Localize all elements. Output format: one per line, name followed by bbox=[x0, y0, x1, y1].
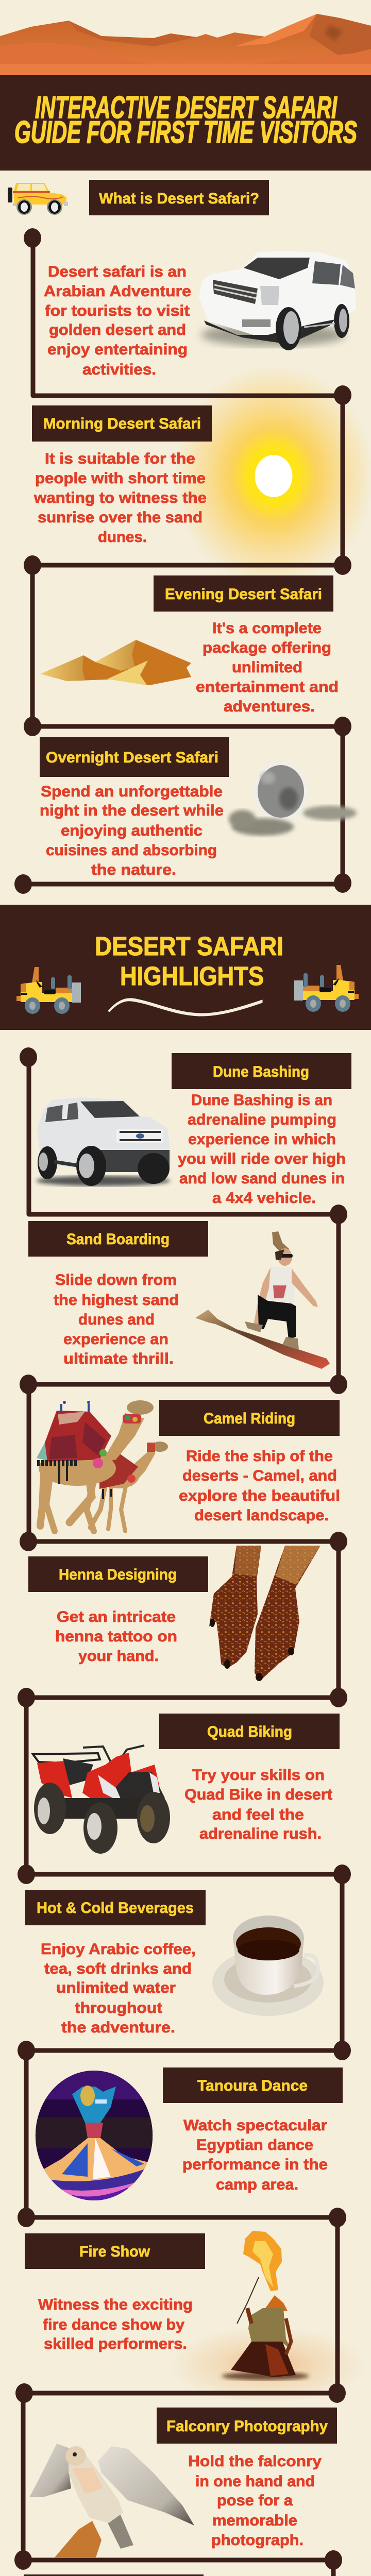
text: morning: dunes. bbox=[98, 529, 147, 546]
text: dune bashing: a 4x4 vehicle. bbox=[212, 1190, 316, 1207]
photo: coffee cup bbox=[212, 1916, 324, 2016]
heading: henna designing: Henna Designing bbox=[59, 1566, 177, 1583]
text: henna: henna tattoo on bbox=[55, 1628, 177, 1645]
text: morning: wanting to witness the bbox=[33, 489, 207, 506]
text: tanoura: Egyptian dance bbox=[196, 2137, 313, 2154]
text: what is desert safari: Desert safari is an bbox=[48, 263, 187, 280]
heading: camel riding: Camel Riding bbox=[204, 1410, 295, 1427]
text: quad biking: and feel the bbox=[212, 1806, 304, 1823]
text: tanoura: camp area. bbox=[216, 2176, 298, 2193]
photo: white SUV bbox=[199, 251, 356, 350]
text: sand boarding: dunes and bbox=[78, 1311, 155, 1328]
heading: fire show: Fire Show bbox=[79, 2243, 150, 2260]
connector frame: buffet bbox=[13, 2560, 342, 2576]
text: fire show: skilled performers. bbox=[44, 2335, 187, 2352]
connector frame: overnight bbox=[14, 726, 351, 894]
heading: falconry photography bbox=[157, 2408, 337, 2444]
text: falconry: in one hand and bbox=[195, 2473, 315, 2490]
text: evening: It's a complete bbox=[212, 620, 322, 637]
text: what is desert safari: for tourists to visit bbox=[45, 302, 190, 319]
text: beverages: unlimited water bbox=[56, 1979, 176, 1996]
text: beverages: the adventure. bbox=[61, 2019, 175, 2036]
text: evening bbox=[196, 620, 339, 715]
text: morning bbox=[33, 450, 207, 546]
heading: morning desert safari: Morning Desert Safari bbox=[43, 415, 201, 432]
text: falconry bbox=[188, 2453, 322, 2549]
photo: falcon bbox=[29, 2444, 194, 2557]
text: dune bashing: and low sand dunes in bbox=[179, 1170, 345, 1187]
connector frame: what is bbox=[24, 228, 351, 405]
swoosh bbox=[108, 998, 262, 1016]
connector frame: tanoura bbox=[18, 2050, 346, 2227]
heading: evening desert safari: Evening Desert Safari bbox=[165, 586, 322, 603]
connector frame: sand boarding bbox=[20, 1214, 347, 1394]
photo: quad bike bbox=[33, 1745, 170, 1854]
heading: henna designing bbox=[28, 1556, 208, 1592]
photo: henna hands bbox=[209, 1546, 321, 1681]
connector frame: quad biking bbox=[18, 1698, 351, 1884]
text: dune bashing: experience in which bbox=[188, 1131, 336, 1148]
heading: morning desert safari bbox=[32, 405, 212, 442]
text: sand boarding bbox=[54, 1272, 179, 1367]
connector frame: falconry bbox=[14, 2393, 342, 2570]
text: tanoura: performance in the bbox=[182, 2156, 328, 2173]
heading: dune bashing bbox=[172, 1053, 351, 1089]
text: falconry: Hold the falconry bbox=[188, 2453, 322, 2470]
text: morning: people with short time bbox=[35, 470, 206, 487]
connector frame: beverages bbox=[18, 1874, 351, 2060]
text: dune bashing bbox=[178, 1092, 346, 1207]
photo: camels bbox=[37, 1400, 168, 1531]
text: henna bbox=[55, 1608, 177, 1665]
text: evening: adventures. bbox=[224, 698, 315, 715]
heading: overnight desert safari: Overnight Desert Safari bbox=[46, 749, 218, 766]
text: tanoura: Watch spectacular bbox=[183, 2117, 327, 2134]
sunrise glow bbox=[173, 365, 371, 587]
text: camel riding: desert landscape. bbox=[194, 1507, 329, 1524]
text: dune bashing: adrenaline pumping bbox=[188, 1111, 336, 1128]
text: beverages bbox=[41, 1941, 196, 2036]
title banner bbox=[0, 75, 371, 171]
icon: yellow jeep top bbox=[8, 183, 68, 215]
connector frame: henna bbox=[18, 1541, 347, 1707]
highlights banner bbox=[0, 905, 371, 1030]
text: camel riding bbox=[179, 1448, 340, 1524]
text: dune bashing: you will ride over high bbox=[178, 1150, 346, 1167]
text: tanoura bbox=[182, 2117, 328, 2193]
heading: sand boarding: Sand Boarding bbox=[66, 1231, 170, 1248]
text: overnight: the nature. bbox=[91, 861, 176, 878]
text: beverages: throughout bbox=[75, 1999, 162, 2016]
text: overnight: enjoying authentic bbox=[61, 822, 203, 839]
header dunes illustration bbox=[0, 14, 371, 75]
connector frame: dune bashing bbox=[20, 1047, 347, 1224]
text: overnight bbox=[40, 783, 224, 878]
text: fire show: Witness the exciting bbox=[38, 2296, 193, 2313]
text: henna: your hand. bbox=[78, 1648, 159, 1665]
icon: moon and clouds bbox=[229, 761, 357, 836]
text: overnight: Spend an unforgettable bbox=[41, 783, 223, 800]
heading: dune bashing: Dune Bashing bbox=[213, 1063, 309, 1080]
heading: desert safari highlights bbox=[95, 931, 283, 991]
fire glow bbox=[170, 2326, 366, 2403]
text: what is desert safari: golden desert and bbox=[49, 321, 186, 338]
heading: desert safari highlights: HIGHLIGHTS bbox=[120, 961, 264, 991]
heading: quad biking: Quad Biking bbox=[207, 1723, 292, 1740]
text: camel riding: Ride the ship of the bbox=[186, 1448, 333, 1465]
heading: hot and cold beverages bbox=[25, 1890, 206, 1925]
heading: what is desert safari bbox=[89, 180, 269, 215]
heading: camel riding bbox=[159, 1400, 340, 1436]
heading: overnight desert safari bbox=[40, 737, 229, 777]
connector frame: fire show bbox=[15, 2217, 346, 2403]
icon: jeep right bbox=[294, 965, 359, 1012]
icon: jeep left bbox=[16, 967, 81, 1014]
text: overnight: night in the desert while bbox=[40, 802, 224, 819]
title bbox=[14, 90, 357, 149]
text: camel riding: deserts - Camel, and bbox=[182, 1467, 337, 1484]
text: beverages: tea, soft drinks and bbox=[44, 1960, 192, 1977]
heading: hot and cold beverages: Hot & Cold Beverages bbox=[37, 1900, 194, 1917]
text: sand boarding: the highest sand bbox=[54, 1292, 179, 1309]
heading: falconry photography: Falconry Photography bbox=[166, 2418, 328, 2435]
heading: what is desert safari: What is Desert Safari? bbox=[99, 190, 259, 207]
connector frame: camel riding bbox=[20, 1384, 347, 1551]
photo: fire performer bbox=[222, 2231, 309, 2380]
heading: tanoura dance bbox=[163, 2067, 343, 2103]
text: quad biking: Quad Bike in desert bbox=[184, 1786, 332, 1803]
text: what is desert safari: Arabian Adventure bbox=[44, 283, 191, 300]
connector frame: evening bbox=[24, 565, 351, 736]
heading: evening desert safari bbox=[154, 575, 333, 612]
text: sand boarding: Slide down from bbox=[55, 1272, 177, 1289]
text: overnight: cuisines and absorbing bbox=[46, 842, 217, 859]
text: fire show: fire dance show by bbox=[43, 2316, 184, 2333]
connector frame: morning bbox=[24, 395, 351, 575]
text: camel riding: explore the beautiful bbox=[179, 1487, 340, 1504]
text: henna: Get an intricate bbox=[57, 1608, 176, 1625]
text: quad biking: adrenaline rush. bbox=[199, 1825, 322, 1842]
text: morning: sunrise over the sand bbox=[38, 509, 203, 526]
text: evening: entertainment and bbox=[196, 679, 339, 696]
heading: quad biking bbox=[159, 1714, 340, 1749]
text: what is desert safari: activities. bbox=[82, 361, 156, 378]
heading: tanoura dance: Tanoura Dance bbox=[197, 2077, 308, 2094]
text: fire show bbox=[38, 2296, 193, 2352]
text: evening: unlimited bbox=[232, 659, 302, 676]
text: beverages: Enjoy Arabic coffee, bbox=[41, 1941, 196, 1958]
text: dune bashing: Dune Bashing is an bbox=[191, 1092, 332, 1109]
text: what is desert safari bbox=[44, 263, 191, 378]
text: evening: package offering bbox=[203, 639, 331, 656]
photo: silver 4x4 bbox=[36, 1097, 171, 1186]
text: what is desert safari: enjoy entertaining bbox=[47, 341, 188, 358]
text: quad biking bbox=[184, 1767, 332, 1842]
text: falconry: memorable bbox=[212, 2512, 297, 2529]
photo: sand boarder bbox=[195, 1231, 330, 1369]
text: sand boarding: experience an bbox=[63, 1331, 168, 1348]
heading: fire show bbox=[25, 2233, 205, 2269]
heading: buffet dinner bbox=[24, 2574, 204, 2576]
text: morning: It is suitable for the bbox=[45, 450, 195, 467]
photo: tanoura dancer bbox=[35, 2071, 153, 2200]
icon: sun bbox=[255, 455, 293, 497]
heading: desert safari highlights: DESERT SAFARI bbox=[95, 931, 283, 961]
text: falconry: photograph. bbox=[211, 2532, 303, 2549]
text: falconry: pose for a bbox=[217, 2492, 293, 2509]
text: sand boarding: ultimate thrill. bbox=[63, 1350, 174, 1367]
heading: sand boarding bbox=[28, 1221, 208, 1257]
text: quad biking: Try your skills on bbox=[192, 1767, 325, 1784]
icon: sand dunes bbox=[41, 640, 191, 685]
